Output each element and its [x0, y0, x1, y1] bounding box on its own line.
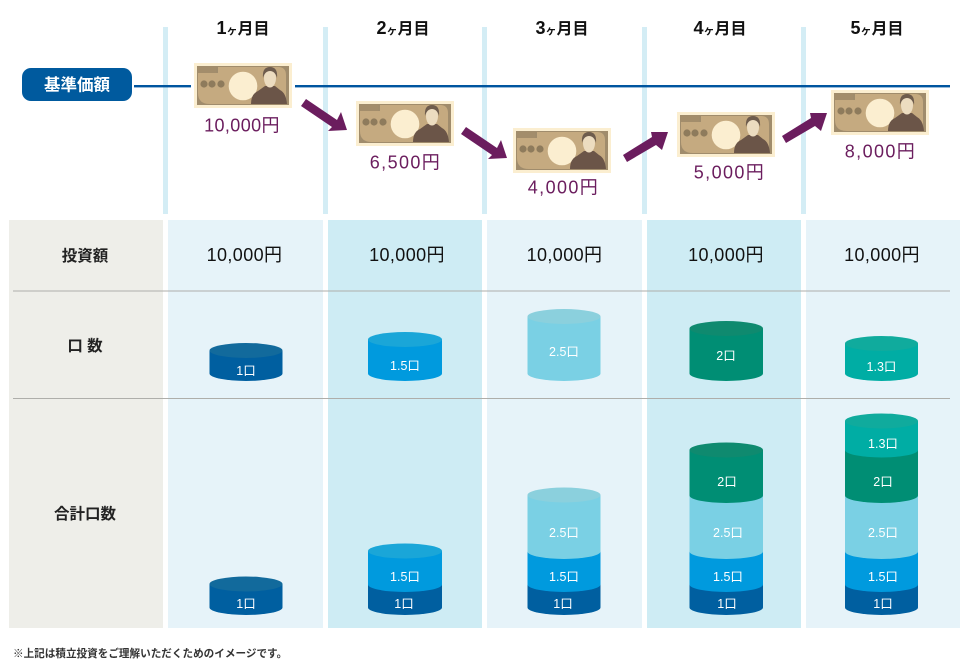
total cylinder month 4: 1口 — [717, 597, 737, 611]
arrow 1 — [301, 99, 347, 131]
month headings: 5ヶ月目 — [850, 18, 904, 38]
base price label: 基準価額 — [44, 74, 110, 94]
total cylinder month 2 — [368, 544, 442, 615]
units cylinder month 3: 2.5口 — [549, 345, 579, 359]
total cylinder month 3: 1.5口 — [549, 570, 579, 584]
units cylinder month 4: 2口 — [716, 349, 736, 363]
background panels — [9, 220, 960, 628]
month headings — [216, 18, 904, 38]
price labels: 5,000円 — [694, 162, 765, 182]
price labels: 10,000円 — [204, 116, 280, 136]
arrow 3 — [623, 132, 668, 162]
total cylinder month 1 — [210, 576, 282, 615]
month headings: 2ヶ月目 — [376, 18, 430, 38]
row labels: 投資額 — [62, 246, 109, 265]
price labels: 4,000円 — [528, 178, 599, 198]
units cylinder month 1: 1口 — [236, 364, 256, 378]
total cylinder month 5: 1.3口 — [868, 437, 898, 451]
arrow 2 — [461, 127, 507, 159]
row labels: 合計口数 — [54, 505, 116, 523]
total cylinder month 4: 2口 — [717, 475, 737, 489]
price labels: 8,000円 — [845, 142, 916, 162]
base price label — [22, 68, 132, 101]
units cylinder month 3 — [528, 309, 600, 381]
bill month 2 — [356, 101, 454, 146]
price labels — [204, 116, 916, 198]
bill month 3 — [513, 128, 611, 173]
total cylinder month 2: 1.5口 — [390, 570, 420, 584]
row labels — [54, 246, 116, 523]
total cylinder month 3: 1口 — [553, 597, 573, 611]
units cylinder month 5 — [845, 336, 918, 381]
units cylinder month 4 — [690, 321, 763, 381]
base price line — [134, 85, 950, 87]
investment amounts: 10,000円 — [844, 245, 920, 265]
units cylinder month 5: 1.3口 — [867, 360, 896, 374]
total cylinder month 5: 2口 — [873, 475, 893, 489]
column separators — [163, 27, 806, 214]
row labels: 口 数 — [67, 337, 103, 355]
bill month 1 — [191, 63, 295, 108]
investment amounts: 10,000円 — [527, 245, 602, 265]
month headings: 3ヶ月目 — [535, 18, 589, 38]
price labels: 6,500円 — [370, 152, 441, 172]
total cylinder month 4 — [690, 442, 763, 615]
investment amounts: 10,000円 — [369, 245, 445, 265]
total cylinder month 3 — [528, 488, 600, 615]
total cylinder month 4: 1.5口 — [713, 570, 743, 584]
units cylinder month 1 — [210, 343, 282, 381]
investment amounts: 10,000円 — [688, 245, 764, 265]
investment amounts — [207, 245, 920, 265]
row rules — [13, 290, 950, 399]
total cylinder month 5: 1口 — [873, 597, 893, 611]
bill month 5 — [828, 90, 931, 135]
total cylinder month 3: 2.5口 — [549, 526, 579, 540]
month headings: 1ヶ月目 — [216, 18, 270, 38]
total cylinder month 5 — [845, 414, 918, 615]
total cylinder month 2: 1口 — [394, 597, 414, 611]
footnote: ※上記は積立投資をご理解いただくためのイメージです。 — [13, 647, 287, 660]
units cylinder month 2 — [368, 332, 442, 381]
units cylinder month 2: 1.5口 — [390, 359, 420, 373]
total cylinder month 4: 2.5口 — [713, 526, 743, 540]
total cylinder month 5: 1.5口 — [868, 570, 898, 584]
month headings: 4ヶ月目 — [693, 18, 747, 38]
arrow 4 — [782, 113, 827, 143]
bill month 4 — [677, 112, 775, 157]
total cylinder month 5: 2.5口 — [868, 526, 898, 540]
investment amounts: 10,000円 — [207, 245, 282, 265]
total cylinder month 1: 1口 — [236, 597, 256, 611]
